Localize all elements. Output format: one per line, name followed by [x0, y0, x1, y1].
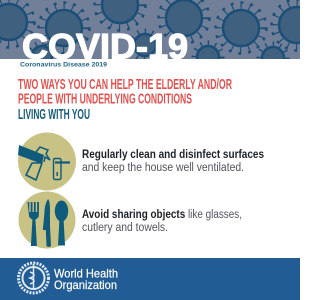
subtitle: Coronavirus Disease 2019 [20, 62, 107, 68]
WHO name: Organization [54, 278, 117, 292]
text block: clean surfaces [82, 149, 264, 174]
text block: avoid sharing: cutlery and towels. [82, 222, 168, 234]
text block: avoid sharing [82, 209, 242, 234]
footer band [0, 258, 300, 300]
text block: clean surfaces: Regularly clean and disinfect surfaces [82, 149, 264, 161]
icon: cleaning spray and door handle [18, 132, 76, 190]
WHO name [54, 266, 118, 292]
WHO emblem [18, 263, 48, 293]
heading: LIVING WITH YOU [18, 107, 90, 123]
banner: virus pattern [0, 0, 300, 59]
text block: clean surfaces: and keep the house well ventilated. [82, 162, 244, 174]
title: COVID-19 [22, 28, 188, 66]
icon: cutlery [18, 192, 76, 248]
text block: avoid sharing: Avoid sharing objects like glasses, [82, 209, 242, 221]
heading [18, 77, 232, 123]
WHO name: World Health [54, 266, 118, 280]
